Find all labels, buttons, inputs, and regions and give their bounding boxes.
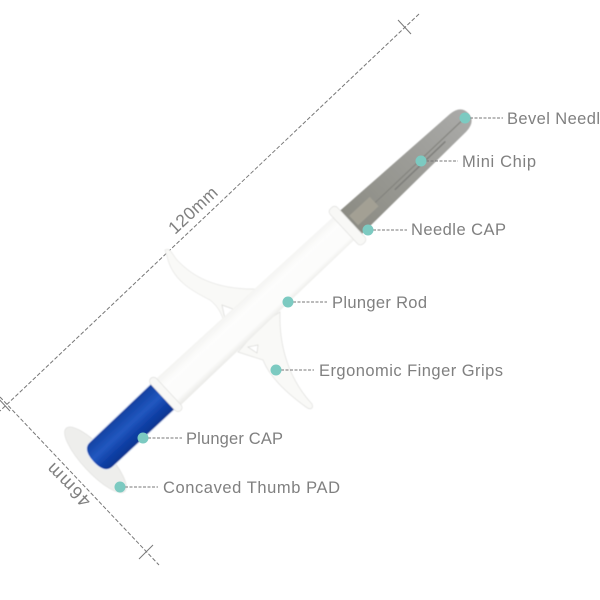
callout: Bevel Needle: Bevel Needl — [507, 110, 600, 128]
callout: Plunger CAP: Plunger CAP — [186, 430, 283, 448]
dimension line: 120mm — [0, 14, 419, 411]
callout: Plunger Rod — [282, 294, 427, 312]
concaved thumb pad — [57, 419, 134, 500]
callout: Bevel Needle — [460, 110, 600, 128]
finger grip: upper — [165, 249, 262, 326]
callout: Plunger CAP — [138, 430, 283, 448]
dimension label: 120mm: 120mm — [164, 182, 222, 238]
callout: Mini Chip: Mini Chip — [462, 153, 536, 171]
syringe body along axis — [57, 82, 498, 500]
needle inner detail — [349, 113, 469, 225]
callout: Needle CAP: Needle CAP — [411, 221, 506, 239]
finger grip: lower — [238, 312, 313, 409]
callout: Needle CAP — [362, 221, 506, 239]
dimension label: 46mm: 46mm — [43, 459, 95, 511]
callout: Ergonomic Finger Grips: Ergonomic Finger Grips — [319, 362, 503, 380]
barrel lower flange — [148, 376, 184, 413]
callout: Concaved Thumb PAD: Concaved Thumb PAD — [163, 479, 340, 497]
dimension line: 46mm — [0, 397, 159, 565]
callout: Mini Chip — [416, 153, 536, 171]
barrel upper flange — [327, 205, 367, 247]
syringe illustration — [57, 82, 498, 500]
plunger rod barrel — [153, 210, 362, 408]
callout: Plunger Rod: Plunger Rod — [332, 294, 427, 312]
plunger cap — [81, 379, 180, 474]
needle cap clear tube — [340, 102, 479, 234]
